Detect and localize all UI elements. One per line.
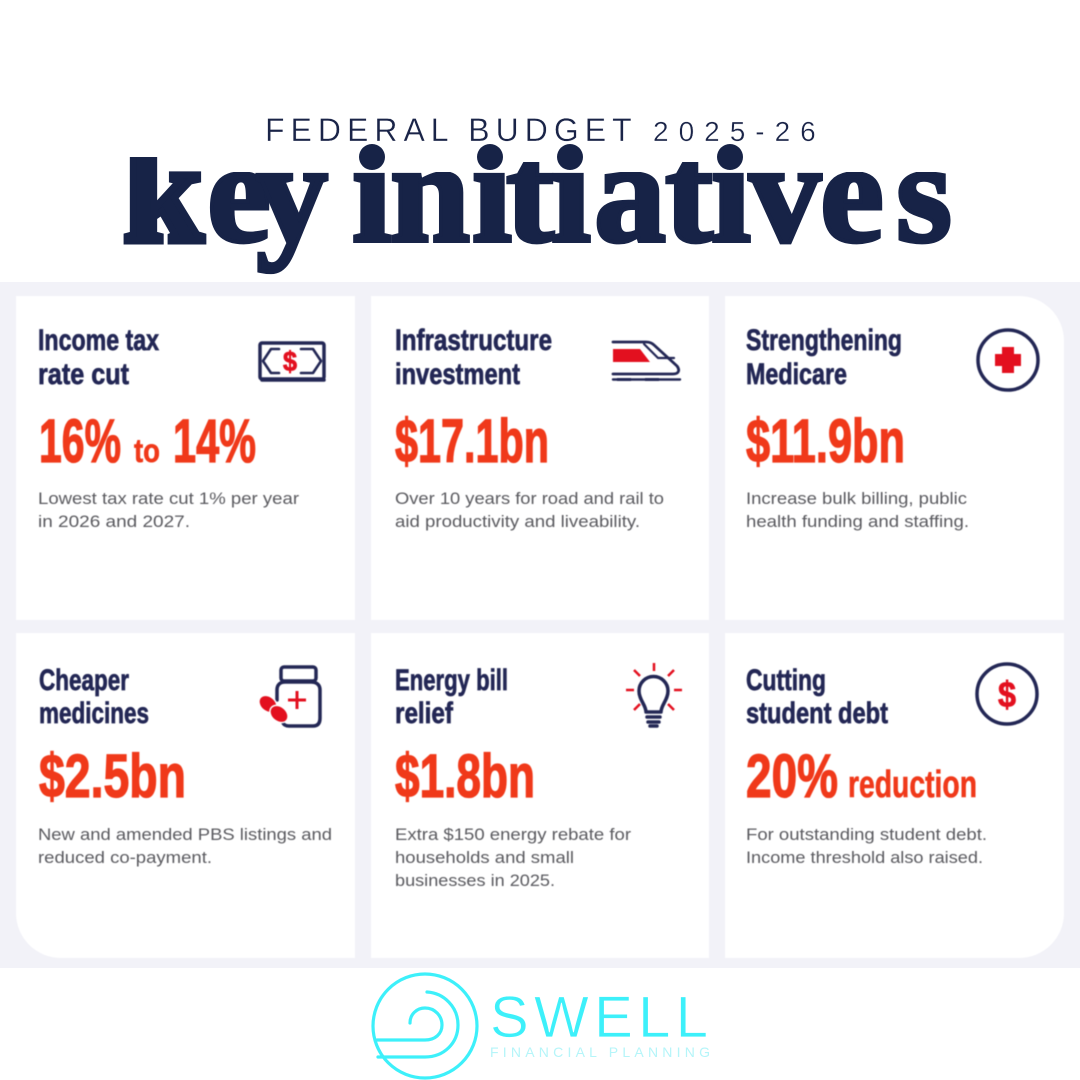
figure: 20%: [746, 742, 838, 810]
panel: cutting student debt: [725, 633, 1064, 958]
panel: income tax rate cut: [16, 296, 355, 620]
panel: cheaper medicines: [16, 633, 355, 958]
description: households and small: [395, 848, 574, 867]
description: [395, 825, 631, 890]
subtitle: 2025-26: [653, 116, 826, 147]
description: health funding and staffing.: [746, 512, 969, 531]
heading: Energy bill: [395, 664, 508, 697]
heading: investment: [395, 358, 520, 391]
icon: medicine bottle and pills: [256, 667, 320, 726]
panel: strengthening medicare: [725, 296, 1064, 620]
icon: banknote: [260, 343, 324, 380]
icon: light bulb: [626, 663, 682, 726]
heading: Strengthening: [746, 324, 902, 357]
icon: wave in circle: [373, 974, 477, 1078]
description: businesses in 2025.: [395, 871, 555, 890]
figure: $11.9bn: [746, 407, 905, 475]
heading: Medicare: [746, 358, 847, 391]
heading: rate cut: [38, 358, 129, 391]
description: [746, 489, 969, 531]
heading: [395, 324, 552, 391]
description: reduced co-payment.: [38, 848, 212, 867]
figure: [39, 407, 256, 475]
description: For outstanding student debt.: [746, 825, 987, 844]
panel: card grid background: [0, 282, 1080, 968]
figure: [746, 742, 977, 810]
panel: energy bill relief: [371, 633, 709, 958]
wordmark: SWELL: [490, 985, 708, 1050]
heading: [395, 664, 508, 730]
heading: [38, 324, 159, 391]
heading: Cutting: [746, 664, 826, 697]
heading: Income tax: [38, 324, 159, 357]
figure: 16%: [39, 407, 121, 475]
figure: reduction: [848, 764, 977, 806]
logo: Swell Financial Planning: [373, 974, 710, 1078]
icon: banknote: $: [283, 346, 297, 377]
subtitle: FEDERAL BUDGET: [265, 112, 638, 148]
figure: $2.5bn: [39, 742, 186, 810]
tagline: FINANCIAL PLANNING: [490, 1044, 710, 1060]
figure: to: [134, 432, 160, 469]
heading: medicines: [39, 697, 149, 730]
description: [395, 489, 664, 531]
description: [38, 489, 299, 531]
figure: $17.1bn: [395, 407, 549, 475]
heading: student debt: [746, 697, 888, 730]
heading: [746, 664, 888, 730]
description: Over 10 years for road and rail to: [395, 489, 664, 508]
panel: infrastructure investment: [371, 296, 709, 620]
icon: dollar coin: $: [998, 674, 1016, 715]
heading: relief: [395, 697, 454, 730]
description: Extra $150 energy rebate for: [395, 825, 631, 844]
title block: [123, 112, 952, 273]
description: in 2026 and 2027.: [38, 512, 190, 531]
icon: train: [613, 342, 680, 381]
description: [38, 825, 332, 867]
description: Increase bulk billing, public: [746, 489, 968, 508]
icon: dollar coin: [977, 664, 1037, 724]
heading: Cheaper: [39, 664, 129, 697]
description: New and amended PBS listings and: [38, 825, 332, 844]
heading: Infrastructure: [395, 324, 552, 357]
main title: key initiatives: [123, 114, 952, 273]
figure: 14%: [173, 407, 256, 475]
icon: medical cross: [978, 330, 1038, 390]
heading: [746, 324, 902, 391]
description: Income threshold also raised.: [746, 848, 983, 867]
heading: [39, 664, 149, 730]
description: [746, 825, 987, 867]
figure: $1.8bn: [395, 742, 535, 810]
description: aid productivity and liveability.: [395, 512, 640, 531]
description: Lowest tax rate cut 1% per year: [38, 489, 299, 508]
